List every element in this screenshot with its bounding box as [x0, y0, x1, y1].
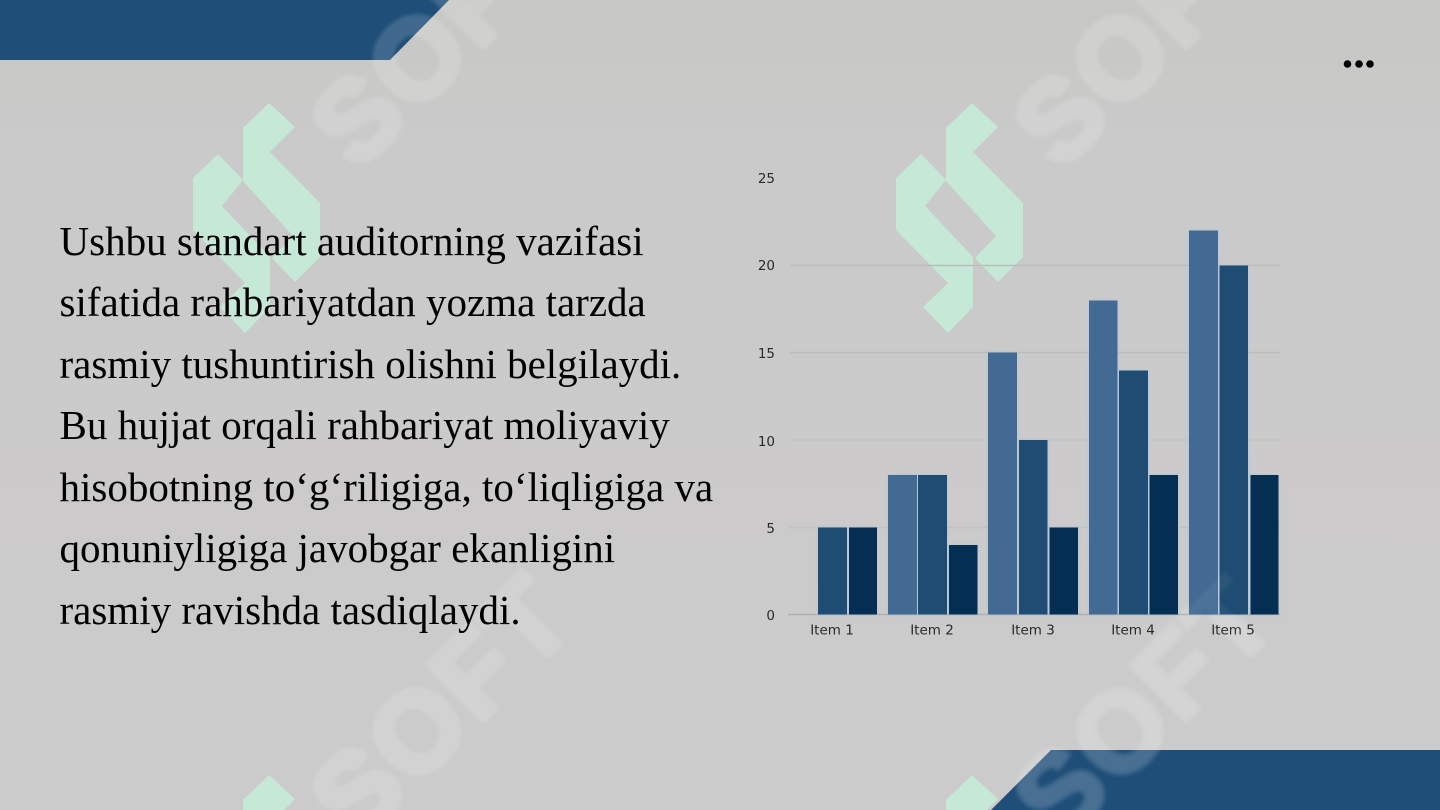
x axis labels: Item 1 — [810, 622, 854, 638]
y axis labels: 20 — [758, 258, 775, 274]
bar chart — [758, 171, 1280, 638]
brand text watermarks — [287, 0, 1300, 810]
body text: sifatida rahbariyatdan yozma tarzda — [60, 279, 646, 325]
menu dots icon — [1344, 60, 1374, 68]
logo watermark: bottom left — [243, 775, 295, 810]
x axis labels: Item 4 — [1111, 622, 1155, 638]
body text: rasmiy ravishda tasdiqlaydi. — [60, 587, 521, 633]
logo watermark: top left — [193, 103, 320, 333]
body text: rasmiy tushuntirish olishni belgilaydi. — [60, 341, 681, 387]
y axis labels — [758, 171, 775, 624]
bars — [818, 230, 1278, 614]
logo watermark: bottom right — [946, 775, 998, 810]
body text: qonuniyligiga javobgar ekanligini — [60, 525, 615, 571]
bars: series 2 — [818, 266, 1248, 614]
y axis labels: 10 — [758, 434, 775, 450]
body text: Bu hujjat orqali rahbariyat moliyaviy — [60, 402, 670, 448]
chart gridlines — [788, 266, 1280, 614]
bars: series 1 — [888, 230, 1218, 614]
y axis labels: 0 — [766, 608, 775, 624]
bottom right banner — [991, 750, 1440, 810]
body text: Ushbu standart auditorning vazifasi — [60, 218, 644, 264]
body text: hisobotning to‘g‘riligiga, to‘liqligiga va — [60, 464, 713, 510]
y axis labels: 15 — [758, 346, 775, 362]
x axis labels: Item 5 — [1211, 622, 1255, 638]
x axis labels: Item 3 — [1011, 622, 1055, 638]
y axis labels: 5 — [766, 521, 775, 537]
body text — [60, 218, 713, 633]
y axis labels: 25 — [758, 171, 775, 187]
bars: series 3 — [849, 475, 1278, 614]
top left banner — [0, 0, 449, 60]
x axis labels — [810, 622, 1255, 638]
logo watermark: top right — [896, 103, 1023, 333]
x axis labels: Item 2 — [910, 622, 954, 638]
